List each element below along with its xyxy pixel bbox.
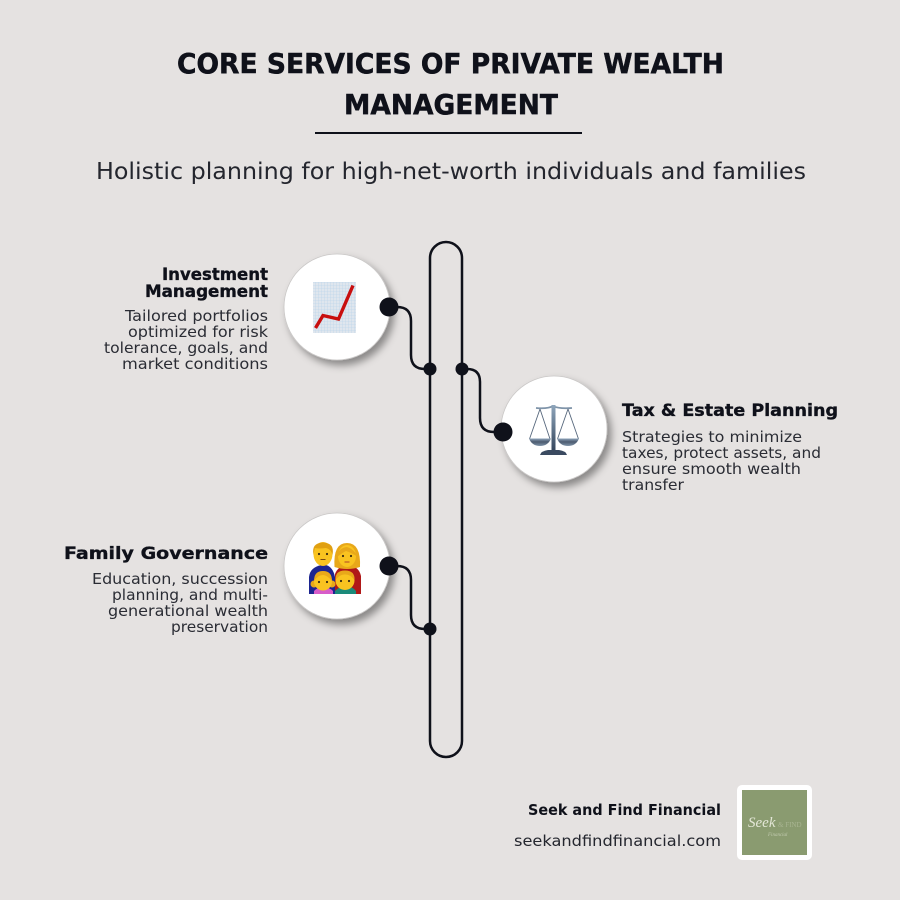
- description: Tailored portfolios: [124, 307, 268, 325]
- footer brand: seekandfindfinancial.com: [514, 832, 721, 850]
- logo: Seek: [748, 815, 776, 831]
- description: generational wealth: [108, 602, 268, 620]
- connector: family: [389, 566, 436, 636]
- heading: [145, 265, 268, 301]
- panel: family governance: [64, 513, 398, 636]
- description: transfer: [622, 476, 685, 494]
- heading: Investment: [162, 265, 268, 284]
- heading: Management: [145, 282, 268, 301]
- description: ensure smooth wealth: [622, 460, 801, 478]
- timeline pill: [430, 242, 462, 757]
- description: tolerance, goals, and: [104, 339, 268, 357]
- panel: investment management: [104, 254, 398, 373]
- connector: tax: [456, 362, 503, 432]
- description: [92, 570, 268, 636]
- description: Strategies to minimize: [622, 428, 802, 446]
- description: Education, succession: [92, 570, 268, 588]
- logo: & FIND: [778, 821, 802, 829]
- title: CORE SERVICES OF PRIVATE WEALTH: [177, 48, 724, 80]
- icon circle: scales: [494, 376, 607, 482]
- icon circle: family: [284, 513, 398, 619]
- logo: [737, 785, 812, 860]
- icon circle: chart: [284, 254, 398, 360]
- description: [622, 428, 821, 494]
- heading: Tax & Estate Planning: [622, 401, 838, 420]
- footer brand: [514, 801, 721, 850]
- description: market conditions: [122, 355, 268, 373]
- description: optimized for risk: [128, 323, 268, 341]
- description: [104, 307, 268, 373]
- description: preservation: [171, 618, 268, 636]
- title: MANAGEMENT: [344, 89, 558, 121]
- description: taxes, protect assets, and: [622, 444, 821, 462]
- description: planning, and multi-: [112, 586, 268, 604]
- panel: tax and estate planning: [494, 376, 838, 494]
- title: [177, 48, 724, 121]
- footer brand: Seek and Find Financial: [528, 801, 721, 819]
- connector: investment: [389, 307, 436, 376]
- subtitle: Holistic planning for high-net-worth individuals and families: [96, 159, 806, 185]
- logo: Financial: [767, 833, 788, 838]
- heading: Family Governance: [64, 544, 268, 563]
